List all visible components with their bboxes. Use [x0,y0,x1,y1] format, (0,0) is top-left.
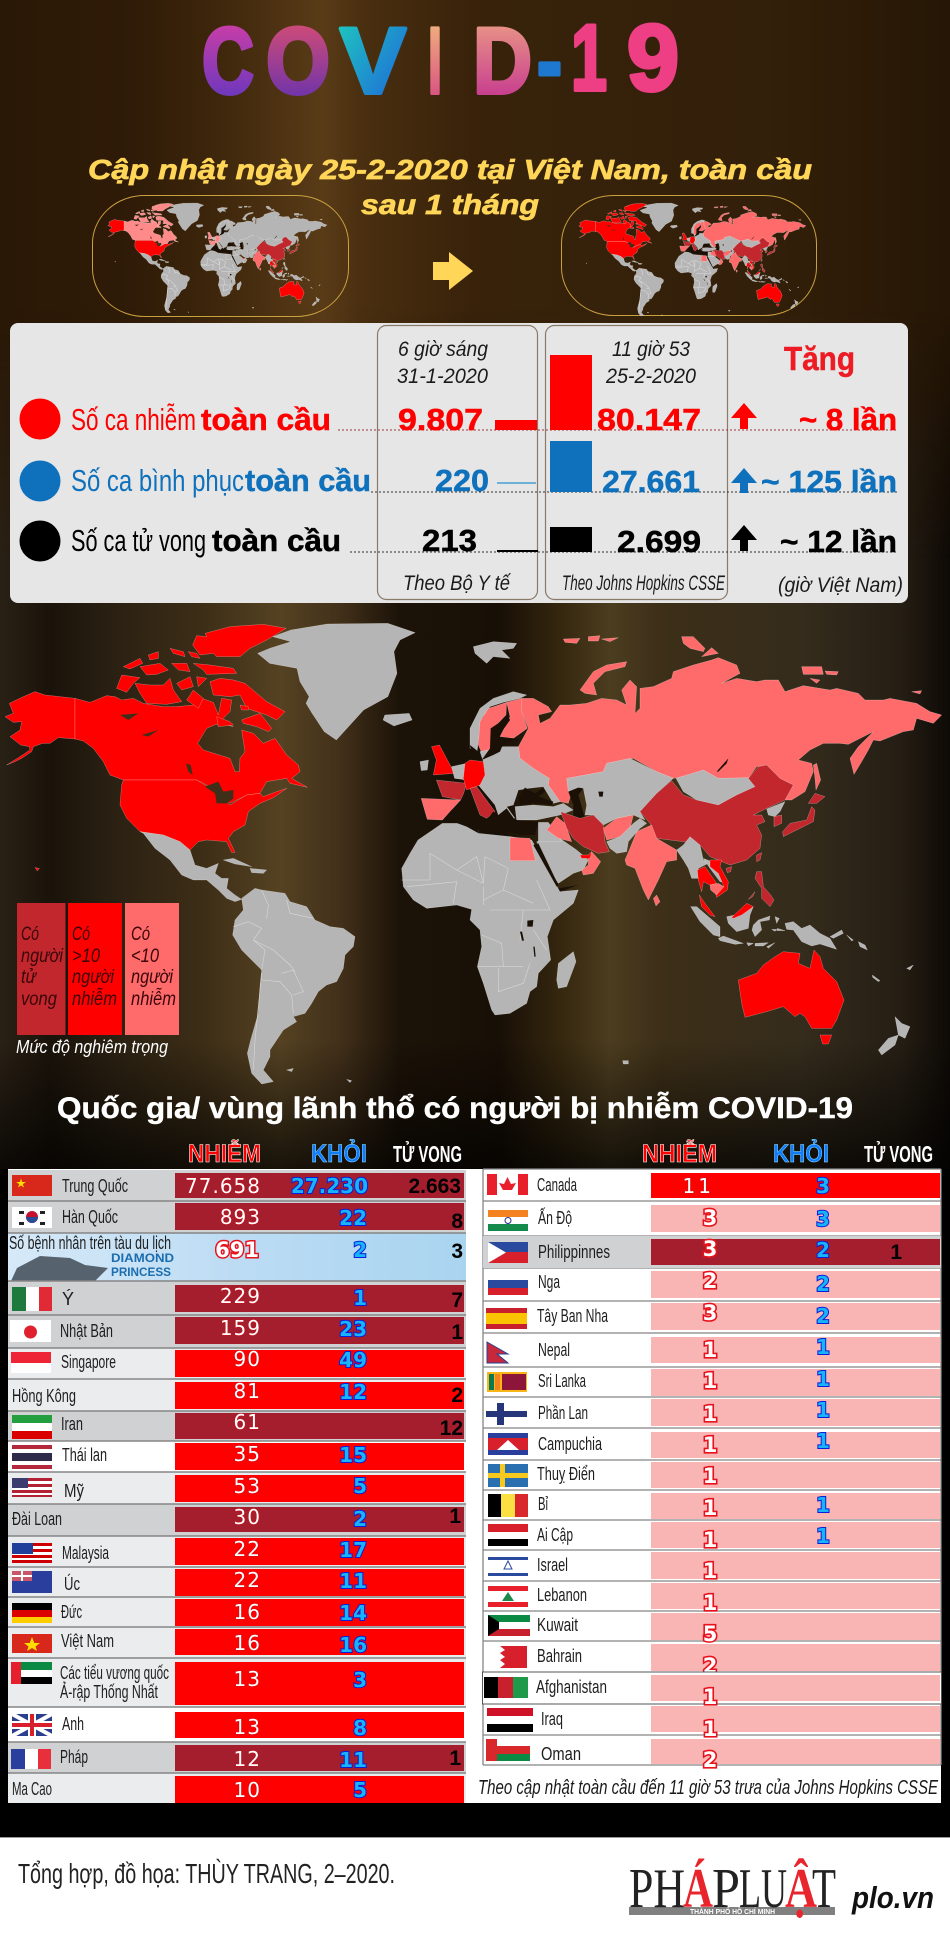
mini world map: after [562,196,816,316]
row: Việt Nam: 16 [234,1631,261,1655]
row: Úc: Úc [64,1573,80,1594]
row: Bỉ: 1 [703,1496,717,1520]
column headers: 25-2-2020 [605,365,696,388]
row: Pháp: 12 [234,1747,261,1771]
legend item: fewer than 10: nhiễm [131,989,176,1010]
row: Nepal [487,1335,940,1363]
title: COVID-19: V [340,8,406,113]
row: Trung Quốc: 2.663 [408,1175,461,1198]
row: Phần Lan [486,1398,940,1426]
legend item: deaths [17,903,66,1035]
column headers: 6 giờ sáng [398,338,488,361]
row: Anh: 8 [353,1716,367,1740]
row: Philippinnes: 1 [890,1241,902,1264]
row: Canada: 3 [816,1174,830,1198]
site name: plo.vn [851,1880,934,1915]
sources [403,572,903,597]
legend item: more than 10: >10 [72,946,100,967]
row: Canada: 11 [683,1174,714,1198]
row: Pháp: 11 [339,1748,367,1772]
row: Bỉ [488,1493,940,1520]
row: Hàn Quốc: Hàn Quốc [62,1207,118,1227]
row: Nga [488,1269,940,1298]
row: recovered: ~ 125 lần [761,464,897,499]
row: recovered: toàn cầu [245,463,371,498]
row: Iran: 61 [234,1410,261,1434]
row: Philippinnes: Philippinnes [538,1242,610,1262]
row: infected: Số ca nhiễm [71,402,196,437]
mini world map: before [92,196,348,316]
row: Diamond Princess: 691 [215,1238,259,1262]
row: Ấn Độ: 3 [816,1207,830,1231]
row: Nhật Bản: 1 [451,1321,463,1344]
row: Malaysia [8,1536,466,1567]
legend item: more than 10: Có [72,924,90,945]
row: Afghanistan: 1 [703,1685,717,1709]
column headers: left table: KHỎI [311,1138,367,1168]
flag: Cambodia [488,1433,528,1455]
table: right [478,1169,942,1799]
flag: South Korea [12,1207,52,1228]
row: Bahrain: 2 [703,1654,717,1678]
flag: Iraq [487,1708,533,1732]
row: Pháp [8,1742,466,1773]
column headers [397,338,696,388]
row: recovered: 27.661 [602,464,700,499]
legend caption: Mức độ nghiêm trọng [16,1037,168,1057]
row: Israel: Israel [537,1555,568,1575]
flag: Japan [10,1320,51,1342]
flag: Nepal [487,1342,508,1363]
logo: Pháp Luật: LU [739,1858,787,1920]
row: infected: 80.147 [597,402,701,437]
row: Bahrain: Bahrain [537,1646,582,1666]
row: Sri Lanka [487,1367,940,1396]
row: deaths: toàn cầu [212,523,341,558]
legend item: fewer than 10: người [131,967,174,988]
logo: Pháp Luật: THÀNH PHỐ HỒ CHÍ MINH [690,1906,775,1916]
legend item: fewer than 10: <10 [131,946,159,967]
row separators [483,1169,941,1765]
row: Phần Lan: 1 [703,1402,717,1426]
flag: Kuwait [488,1615,530,1636]
row: Diamond Princess [8,1233,466,1281]
row: recovered [20,441,897,502]
row: Diamond Princess: Số bệnh nhân trên tàu du lịch [9,1233,171,1253]
row: Hồng Kông: 12 [339,1380,367,1404]
column headers: 31-1-2020 [397,365,488,388]
flag: Israel [488,1557,528,1576]
row: Singapore: 90 [234,1347,261,1371]
flag: Malaysia [12,1543,52,1563]
icon: cruise ship [11,1256,108,1281]
row: Bỉ: 1 [816,1493,830,1517]
row: Úc: 22 [234,1568,261,1592]
flag: Philippines [488,1242,528,1263]
row: Thái lan: 35 [234,1442,261,1466]
column headers: right table [642,1138,933,1168]
sources: Theo Bộ Y tế [403,572,511,595]
row: Diamond Princess: 2 [353,1238,367,1262]
row: Nepal: 1 [816,1335,830,1359]
world map [5,623,942,1084]
row: Lebanon [488,1583,940,1615]
row: Ai Cập: 1 [816,1524,830,1548]
subtitle: Cập nhật ngày 25-2-2020 tại Việt Nam, toàn cầu [88,154,812,185]
row separators [8,1201,466,1773]
row: Đức: Đức [61,1602,82,1622]
title: COVID-19: 1 [571,5,607,110]
row: Ma Cao: Ma Cao [12,1779,52,1799]
row: Tây Ban Nha: 3 [703,1301,717,1325]
flag: UK [12,1714,52,1736]
row: Mỹ: 5 [353,1474,367,1498]
heading: countries: Quốc gia/ vùng lãnh thổ có người bị nhiễm COVID-19 [57,1091,853,1125]
flag: Afghanistan [484,1677,528,1698]
row: Ai Cập [488,1522,940,1552]
row: Campuchia: Campuchia [538,1434,603,1454]
row: Thuỵ Điển [488,1462,940,1488]
flag: Sri Lanka [487,1372,527,1392]
heading: Tăng: Tăng [784,340,855,377]
column headers: 11 giờ 53 [612,338,690,361]
row: Anh [8,1707,466,1742]
legend item: more than 10: người [72,967,115,988]
row: Ý: Ý [62,1289,74,1309]
legend item: fewer than 10 [125,903,179,1035]
row: Ai Cập: 1 [703,1528,717,1552]
row: Mỹ [8,1472,466,1504]
row: Israel [488,1552,940,1583]
row: Canada [487,1173,940,1198]
row: Ý: 1 [353,1286,367,1310]
row: Hàn Quốc [8,1201,466,1233]
row: Nga: 2 [816,1272,830,1296]
row: Ma Cao: 5 [353,1778,367,1802]
flag: Italy [12,1287,52,1311]
flag: Bahrain [500,1646,527,1668]
row: Hàn Quốc: 8 [451,1210,463,1233]
column headers: right table: KHỎI [773,1138,829,1168]
row: Diamond Princess: DIAMOND [111,1251,174,1265]
flag: Spain [486,1308,527,1329]
row: Trung Quốc: 27.230 [291,1174,368,1198]
row: Afghanistan [482,1672,942,1709]
row: UAE [8,1658,466,1707]
row: Đài Loan [8,1504,466,1536]
row: Lebanon: 1 [703,1591,717,1615]
row: deaths [20,520,897,562]
row: Đức [8,1597,466,1627]
row: Việt Nam: Việt Nam [61,1631,114,1651]
row: Tây Ban Nha: 2 [816,1304,830,1328]
flag: Finland [486,1403,527,1425]
row: recovered: 220 [435,463,489,498]
row: Ý: 229 [220,1284,261,1308]
row: Úc: 11 [339,1569,367,1593]
row: Việt Nam [8,1627,466,1658]
row: Trung Quốc [8,1170,466,1201]
row: Ý [8,1281,466,1315]
flag: France [11,1749,51,1769]
flag: Russia [488,1280,528,1295]
flag: Australia [12,1571,52,1593]
row: Singapore [8,1347,466,1379]
row: Đài Loan: 30 [234,1505,261,1529]
row: deaths: 2.699 [617,524,701,559]
flag: Belgium [488,1494,528,1517]
logo: Pháp Luật: P [712,1858,740,1920]
arrow: before to after [433,252,473,290]
row: Ma Cao: 10 [234,1778,261,1802]
row: deaths: Số ca tử vong [71,523,206,558]
title: COVID-19: C [202,8,254,113]
row: Iraq: Iraq [541,1709,563,1729]
flag: China [12,1175,52,1196]
row: deaths: ~ 12 lần [780,524,897,559]
row: infected: ~ 8 lần [799,402,897,437]
row: Diamond Princess: PRINCESS [111,1265,171,1279]
flag: India [488,1210,528,1231]
row: Thuỵ Điển: 1 [703,1464,717,1488]
legend item: more than 10: nhiễm [72,989,117,1010]
row: Philippinnes: 3 [703,1237,717,1261]
row: Philippinnes: 2 [816,1238,830,1262]
row: Mỹ: Mỹ [64,1481,84,1501]
row: Nhật Bản [8,1315,466,1348]
row: Malaysia: 22 [234,1537,261,1561]
row: Kuwait: Kuwait [537,1615,578,1635]
row: recovered: Số ca bình phục [71,463,244,498]
row: Thuỵ Điển: Thuỵ Điển [537,1464,595,1484]
row: Iraq [487,1706,940,1741]
row: Mỹ: 53 [234,1474,261,1498]
logo: Pháp Luật: Á [683,1858,713,1920]
row: Ý: 7 [451,1289,463,1312]
column headers: left table [188,1138,462,1168]
flag: Sweden [488,1464,528,1487]
row: Sri Lanka: 1 [703,1369,717,1393]
row: Hàn Quốc: 22 [339,1206,367,1230]
row: infected: toàn cầu [201,402,331,437]
row: Phần Lan: Phần Lan [538,1403,588,1423]
row: Nhật Bản: 23 [339,1317,367,1341]
legend [16,903,179,1057]
title: COVID-19: O [266,8,330,113]
logo: Pháp Luật: Ậ [785,1857,817,1920]
row: Trung Quốc: Trung Quốc [62,1176,128,1196]
title: COVID-19: D [473,8,532,113]
row: Hồng Kông: Hồng Kông [12,1386,76,1406]
row: Tây Ban Nha: Tây Ban Nha [537,1306,609,1326]
row: Canada: Canada [537,1175,578,1195]
column headers: left table: TỬ VONG [393,1139,462,1167]
row: UAE: 13 [234,1667,261,1691]
row: Singapore: 49 [339,1348,367,1372]
legend item: deaths: người [21,946,64,967]
row: Trung Quốc: 77.658 [185,1174,261,1198]
title: COVID-19: I [428,8,442,113]
row: Úc [8,1567,466,1597]
row: Nhật Bản: Nhật Bản [60,1321,113,1341]
legend item: fewer than 10: Có [131,924,150,945]
row: Campuchia [488,1429,940,1458]
flag: USA [12,1478,52,1497]
flag: UAE [11,1662,52,1684]
row: Diamond Princess: 3 [451,1240,463,1263]
row: Anh: 13 [234,1715,261,1739]
row: Pháp: Pháp [60,1747,88,1767]
logo: Pháp Luật [629,1857,836,1920]
row: Đài Loan: 2 [353,1507,367,1531]
row: Nepal: 1 [703,1338,717,1362]
flag: Germany [12,1603,52,1623]
flag: Canada [487,1174,528,1195]
legend item: more than 10 [68,903,122,1035]
row: Nga: Nga [538,1272,561,1292]
row: Thái lan: Thái lan [62,1445,107,1465]
row: Oman: 2 [703,1748,717,1772]
subtitle: sau 1 tháng [361,189,539,220]
row: UAE: Ả-rập Thống Nhất [60,1681,158,1702]
flag: Iran [12,1415,52,1439]
subtitle [88,154,812,220]
row: Sri Lanka: 1 [816,1367,830,1391]
row: Kuwait [488,1613,940,1646]
row: Đức: 14 [339,1601,367,1625]
column box: 25-2-2020 [546,326,728,600]
row: deaths: 213 [422,523,477,558]
flag: Singapore [11,1352,51,1373]
row: Bỉ: Bỉ [538,1494,548,1514]
row: Ma Cao [8,1773,466,1803]
logo: Pháp Luật: PH [629,1858,685,1920]
title: COVID-19: 9 [627,5,679,110]
row: Thái lan: 15 [339,1443,367,1467]
flag: Vietnam [12,1634,52,1653]
row: Đài Loan: Đài Loan [12,1509,62,1529]
flag: China: ★ [16,1179,26,1190]
row: Bahrain [500,1644,940,1678]
row: Malaysia: Malaysia [62,1543,110,1563]
title: COVID-19 [202,5,679,113]
row: Oman: Oman [541,1744,581,1764]
row: Kuwait: 5 [703,1622,717,1646]
row: Oman [486,1739,940,1772]
row: Nhật Bản: 159 [220,1316,261,1340]
panel: global statistics [10,323,908,603]
row: Ấn Độ: Ấn Độ [538,1207,572,1228]
row: UAE: Các tiểu vương quốc [60,1663,169,1683]
row: Tây Ban Nha [486,1301,940,1330]
footer [0,1837,950,1939]
row: Philippinnes [483,1236,941,1268]
row: Iran: Iran [61,1414,83,1434]
sources: Theo Johns Hopkins CSSE [562,572,726,595]
flag: Egypt [488,1524,528,1546]
legend item: deaths: tử [21,967,38,988]
column headers: right table: NHIỄM [642,1138,717,1168]
row: Malaysia: 17 [339,1538,367,1562]
table sheet [8,1169,941,1803]
row: Hàn Quốc: 893 [220,1205,261,1229]
flag: Lebanon [488,1586,528,1607]
row: Sri Lanka: Sri Lanka [538,1371,587,1391]
row: Iraq: 1 [703,1717,717,1741]
sources: (giờ Việt Nam) [778,574,903,597]
row: infected [20,355,897,440]
flag: Thailand [12,1445,52,1469]
row: Afghanistan: Afghanistan [536,1677,607,1697]
row: Hồng Kông [8,1379,466,1411]
row: Đài Loan: 1 [449,1505,461,1528]
credit: Tổng hợp, đồ họa: THÙY TRANG, 2–2020. [18,1858,395,1889]
legend item: deaths: Có [21,924,39,945]
row: UAE: 3 [353,1668,367,1692]
row: Nga: 2 [703,1269,717,1293]
column headers: left table: NHIỄM [188,1138,261,1168]
row: Hồng Kông: 2 [451,1384,463,1407]
row: Hồng Kông: 81 [234,1379,261,1403]
row: Campuchia: 1 [703,1433,717,1457]
flag: Oman [486,1739,530,1761]
title: COVID-19: - [537,8,562,113]
page background [0,0,950,1169]
row: Thái lan [8,1441,466,1472]
row: Đức: 16 [234,1600,261,1624]
dotted baselines [338,430,897,552]
row: Pháp: 1 [449,1747,461,1770]
row: Nepal: Nepal [538,1340,570,1360]
legend item: deaths: vong [21,989,57,1010]
row: Anh: Anh [62,1714,84,1734]
row: Ấn Độ [488,1205,940,1232]
row: Iran: 12 [440,1417,463,1440]
row: Lebanon: Lebanon [537,1585,587,1605]
table: left [8,1170,466,1803]
logo: Pháp Luật: T [812,1858,836,1920]
row: Campuchia: 1 [816,1429,830,1453]
row: Việt Nam: 16 [339,1633,367,1657]
row: Israel: 1 [703,1559,717,1583]
row: Ai Cập: Ai Cập [537,1525,573,1545]
row: Singapore: Singapore [61,1352,116,1372]
row: Iran [8,1410,466,1441]
row: infected: 9.807 [398,402,483,437]
row: Phần Lan: 1 [816,1398,830,1422]
column box: 31-1-2020 [378,326,538,600]
row: Ấn Độ: 3 [703,1206,717,1230]
